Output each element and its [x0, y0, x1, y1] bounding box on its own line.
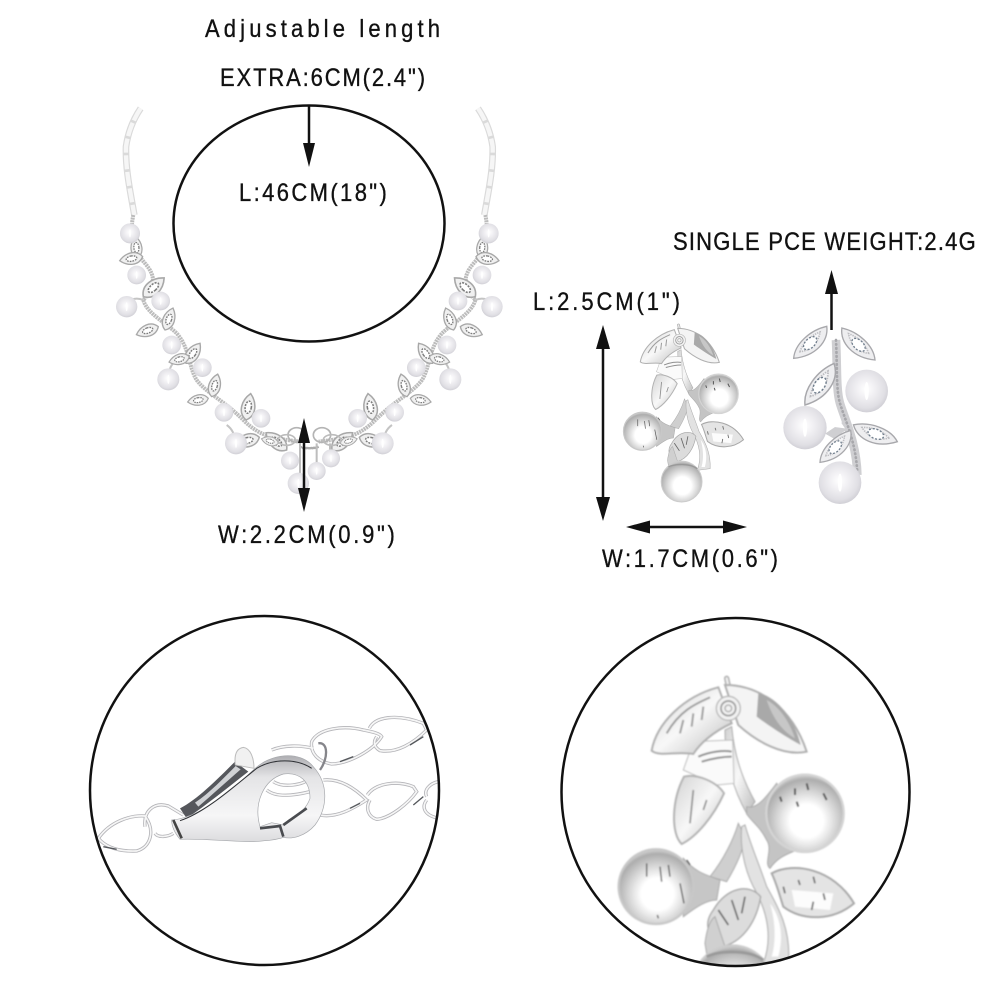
earring crystal leaves	[788, 326, 897, 463]
earring stem	[832, 340, 857, 475]
label: necklace length: L:46CM(18")	[239, 179, 387, 206]
necklace right half	[302, 108, 503, 455]
arrow: necklace width	[298, 418, 310, 512]
clasp detail ring	[90, 616, 439, 965]
clasp lever	[180, 762, 248, 818]
earring detail ring	[562, 618, 910, 966]
necklace left half	[116, 108, 317, 455]
arrow: earring weight	[825, 270, 838, 330]
clasp and chain	[98, 717, 438, 851]
centre pendant pearls	[281, 440, 340, 494]
label: necklace width: W:2.2CM(0.9")	[218, 521, 395, 548]
label: earring length: L:2.5CM(1")	[533, 288, 680, 315]
necklace length ring	[174, 106, 444, 342]
clasp body	[172, 756, 325, 842]
panel: clasp detail	[90, 616, 439, 965]
label: single piece weight: SINGLE PCE WEIGHT:2.4G	[673, 228, 976, 255]
label: earring width: W:1.7CM(0.6")	[602, 545, 778, 572]
arrow: necklace extension	[303, 105, 315, 167]
enlarged earring back	[619, 678, 854, 1000]
panel: earring back detail	[562, 618, 910, 1000]
arrow: earring length	[596, 325, 610, 521]
earring front view	[783, 326, 897, 504]
earring back view	[623, 325, 743, 502]
necklace with pearls	[116, 108, 503, 494]
label: extra length: EXTRA:6CM(2.4")	[220, 64, 425, 91]
earring pearls	[783, 370, 888, 504]
heading: adjustable length: Adjustable length	[205, 15, 440, 42]
chain links	[98, 717, 438, 851]
arrow: earring width	[626, 520, 747, 534]
